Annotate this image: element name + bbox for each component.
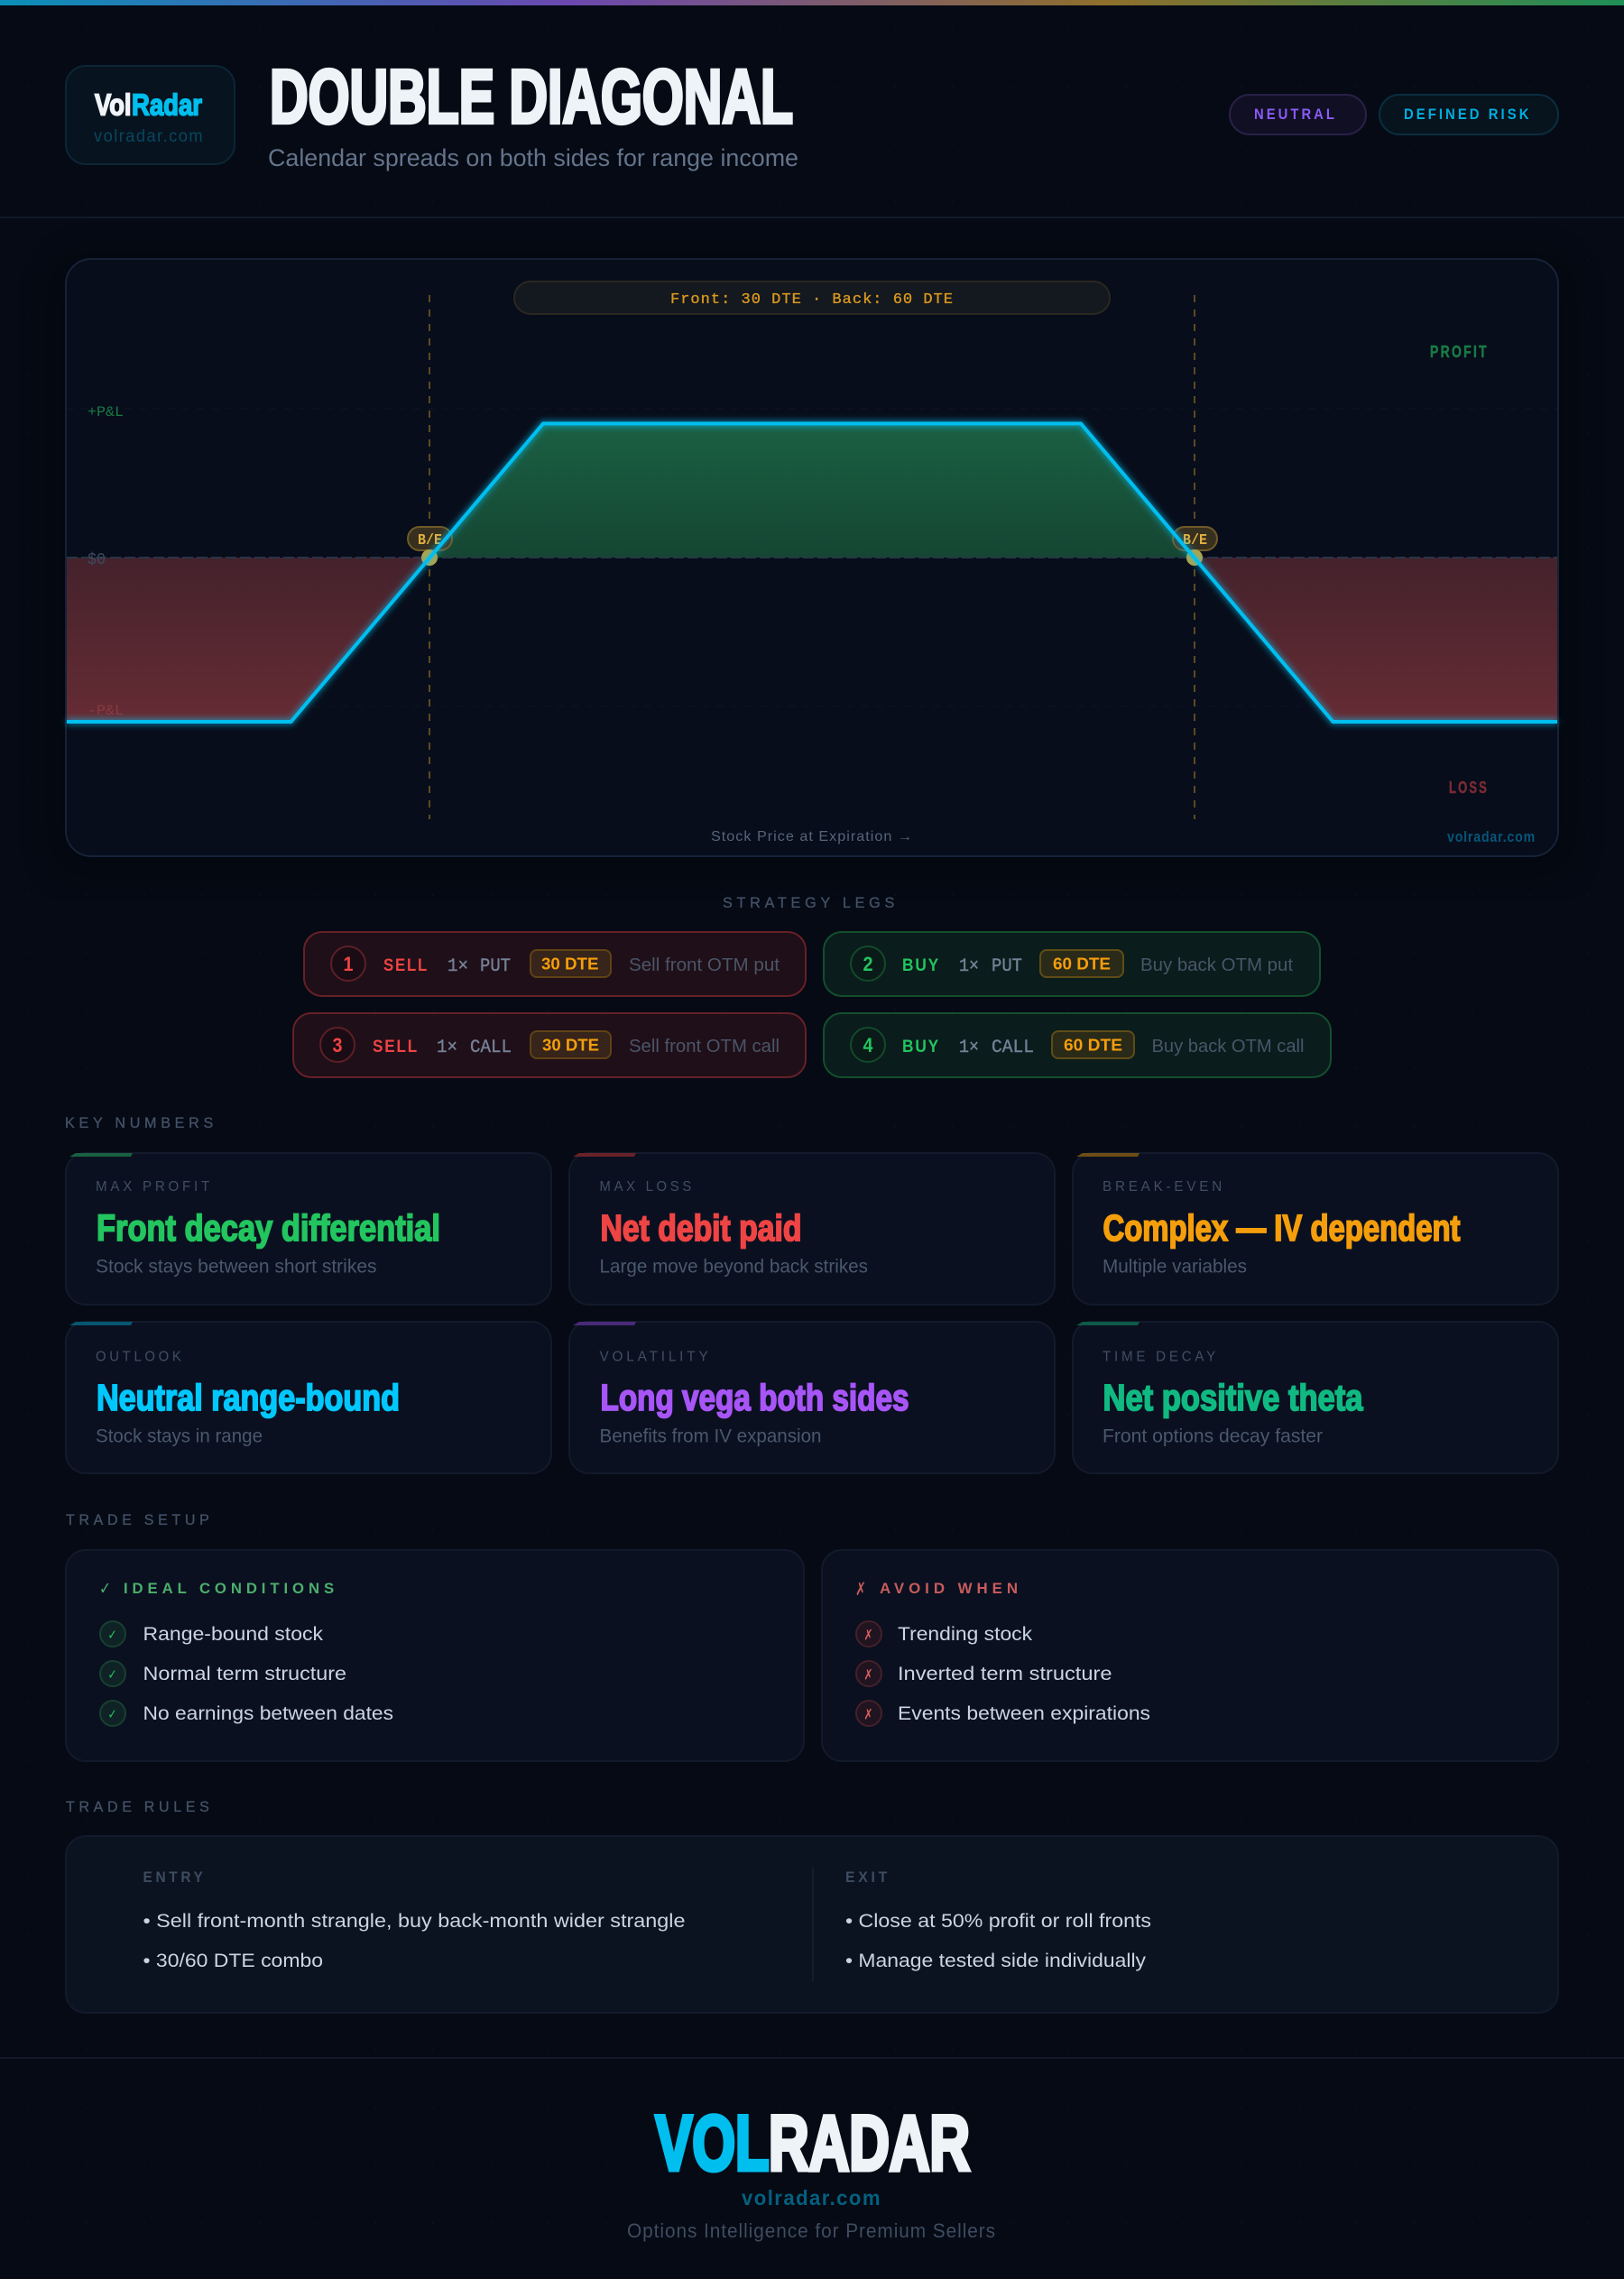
tag: neutral xyxy=(1230,95,1366,134)
DTE pill xyxy=(514,281,1110,314)
exit rules: EXIT xyxy=(845,1868,890,1886)
panel: ideal conditions: Normal term structure xyxy=(143,1663,346,1684)
leg 4: 4 xyxy=(863,1034,873,1056)
section heading: key numbers: KEY NUMBERS xyxy=(65,1114,217,1131)
profit zone xyxy=(429,424,1195,558)
tag: neutral: NEUTRAL xyxy=(1254,106,1337,123)
leg 1: 1× xyxy=(448,956,468,977)
leg 3: 1× xyxy=(437,1038,457,1058)
entry rules: • Sell front-month strangle, buy back-month wider strangle xyxy=(143,1910,686,1932)
card: max profit: MAX PROFIT xyxy=(96,1179,213,1195)
panel: avoid when: Trending stock xyxy=(898,1623,1032,1645)
card: break-even: Multiple variables xyxy=(1103,1256,1247,1278)
card: time decay: Net positive theta xyxy=(1103,1377,1363,1418)
loss zones xyxy=(67,558,1557,722)
footer wordmark: VOL xyxy=(655,2100,769,2187)
footer tagline: Options Intelligence for Premium Sellers xyxy=(627,2219,996,2242)
zone label: loss: LOSS xyxy=(1449,779,1489,797)
leg 3: 30 DTE xyxy=(542,1036,599,1054)
panel: avoid when: ✗ xyxy=(855,1578,866,1600)
break-even marker right: B/E xyxy=(1183,532,1207,549)
panel: avoid when: ✗ xyxy=(864,1665,873,1684)
chart watermark: volradar.com xyxy=(1447,828,1536,845)
panel: avoid when: Inverted term structure xyxy=(898,1663,1112,1684)
x axis label: Stock Price at Expiration → xyxy=(711,829,913,844)
axis label: $0: $0 xyxy=(88,551,106,569)
card: outlook: Neutral range-bound xyxy=(97,1377,400,1418)
DTE pill: Front: 30 DTE · Back: 60 DTE xyxy=(670,291,954,309)
leg 2: BUY xyxy=(902,956,940,975)
card: break-even: BREAK-EVEN xyxy=(1103,1179,1225,1195)
panel: avoid when: ✗ xyxy=(864,1626,873,1644)
panel: ideal conditions xyxy=(66,1550,804,1761)
leg 2: 2 xyxy=(863,953,873,975)
logo badge: Radar xyxy=(132,88,202,121)
section heading: trade rules: TRADE RULES xyxy=(66,1798,213,1815)
card: volatility: Long vega both sides xyxy=(601,1377,909,1418)
leg 3: 3 xyxy=(332,1034,343,1056)
break-even marker left: B/E xyxy=(418,532,442,549)
card: time decay: TIME DECAY xyxy=(1103,1350,1219,1364)
footer url: volradar.com xyxy=(742,2186,881,2210)
leg 1: Sell front OTM put xyxy=(629,955,780,975)
card: max loss: MAX LOSS xyxy=(599,1179,695,1195)
leg 3: CALL xyxy=(470,1038,512,1058)
panel: ideal conditions: ✓ xyxy=(108,1666,117,1683)
card: volatility xyxy=(569,1322,1055,1473)
panel: avoid when xyxy=(822,1550,1558,1761)
payoff line xyxy=(67,424,1557,722)
section heading: trade setup: TRADE SETUP xyxy=(66,1511,213,1528)
card: outlook: Stock stays in range xyxy=(96,1426,263,1447)
panel: ideal conditions: Range-bound stock xyxy=(143,1623,323,1645)
card: max loss xyxy=(569,1153,1055,1305)
subtitle: Calendar spreads on both sides for range income xyxy=(268,144,798,171)
panel: ideal conditions: ✓ xyxy=(108,1706,117,1722)
footer wordmark: RADAR xyxy=(769,2100,970,2187)
leg 1: PUT xyxy=(480,956,511,977)
leg 4: BUY xyxy=(902,1038,940,1056)
leg 1 xyxy=(304,932,806,996)
panel: avoid when: ✗ xyxy=(864,1705,873,1723)
zone label: profit: PROFIT xyxy=(1430,343,1489,361)
section heading: strategy legs: STRATEGY LEGS xyxy=(723,894,899,911)
card: outlook xyxy=(66,1322,551,1473)
leg 3: Sell front OTM call xyxy=(629,1036,780,1056)
card: break-even: Complex — IV dependent xyxy=(1103,1207,1460,1249)
card: break-even xyxy=(1073,1153,1558,1305)
footer wordmark xyxy=(655,2100,970,2187)
card: max profit: Stock stays between short strikes xyxy=(96,1256,377,1278)
leg 2: 60 DTE xyxy=(1053,955,1111,973)
exit rules xyxy=(845,1868,1151,1971)
leg 3: SELL xyxy=(373,1038,419,1056)
tag: defined risk: DEFINED RISK xyxy=(1404,106,1532,123)
card: max profit: Front decay differential xyxy=(97,1207,440,1249)
panel: avoid when: AVOID WHEN xyxy=(880,1580,1022,1597)
break-even marker right xyxy=(1173,527,1217,566)
leg 2 xyxy=(824,932,1320,996)
top gradient bar xyxy=(0,0,1624,5)
logo badge: volradar.com xyxy=(94,127,204,146)
card: time decay: Front options decay faster xyxy=(1103,1426,1323,1447)
card: volatility: VOLATILITY xyxy=(599,1350,711,1364)
leg 4 xyxy=(824,1013,1331,1077)
axis label: +P&L: +P&L xyxy=(88,404,124,420)
logo badge xyxy=(66,66,235,164)
entry rules: • 30/60 DTE combo xyxy=(143,1950,323,1971)
panel: ideal conditions: IDEAL CONDITIONS xyxy=(124,1580,338,1597)
leg 1: SELL xyxy=(383,956,429,975)
exit rules: • Manage tested side individually xyxy=(845,1950,1146,1971)
leg 2: PUT xyxy=(992,956,1022,977)
axis label: -P&L: -P&L xyxy=(88,703,124,719)
entry rules xyxy=(143,1868,686,1971)
entry rules: ENTRY xyxy=(143,1868,206,1886)
leg 4: 1× xyxy=(959,1038,979,1058)
leg 2: Buy back OTM put xyxy=(1140,955,1293,975)
footer xyxy=(627,2100,996,2242)
leg 3 xyxy=(293,1013,806,1077)
exit rules: • Close at 50% profit or roll fronts xyxy=(845,1910,1151,1932)
tag: defined risk xyxy=(1379,95,1558,134)
panel: ideal conditions: No earnings between dates xyxy=(143,1702,393,1724)
panel: ideal conditions: ✓ xyxy=(108,1627,117,1643)
leg 2: 1× xyxy=(959,956,979,977)
card: max loss: Net debit paid xyxy=(601,1207,801,1249)
leg 4: CALL xyxy=(992,1038,1034,1058)
leg 1: 1 xyxy=(343,953,354,975)
logo badge: Vol xyxy=(95,88,132,121)
card: max loss: Large move beyond back strikes xyxy=(599,1256,868,1278)
panel: ideal conditions: ✓ xyxy=(99,1579,111,1599)
card: volatility: Benefits from IV expansion xyxy=(599,1426,821,1447)
card: max profit xyxy=(66,1153,551,1305)
leg 1: 30 DTE xyxy=(541,955,599,973)
card: outlook: OUTLOOK xyxy=(96,1350,184,1364)
payoff chart panel xyxy=(54,258,1570,872)
break-even marker left xyxy=(408,527,452,566)
card: time decay xyxy=(1073,1322,1558,1473)
panel: trade rules xyxy=(66,1836,1558,2013)
title: DOUBLE DIAGONAL xyxy=(270,54,793,139)
break-even guide lines xyxy=(429,295,1195,819)
header xyxy=(66,54,1558,171)
leg 4: 60 DTE xyxy=(1064,1036,1122,1054)
panel: avoid when: Events between expirations xyxy=(898,1702,1150,1724)
leg 4: Buy back OTM call xyxy=(1151,1036,1305,1056)
